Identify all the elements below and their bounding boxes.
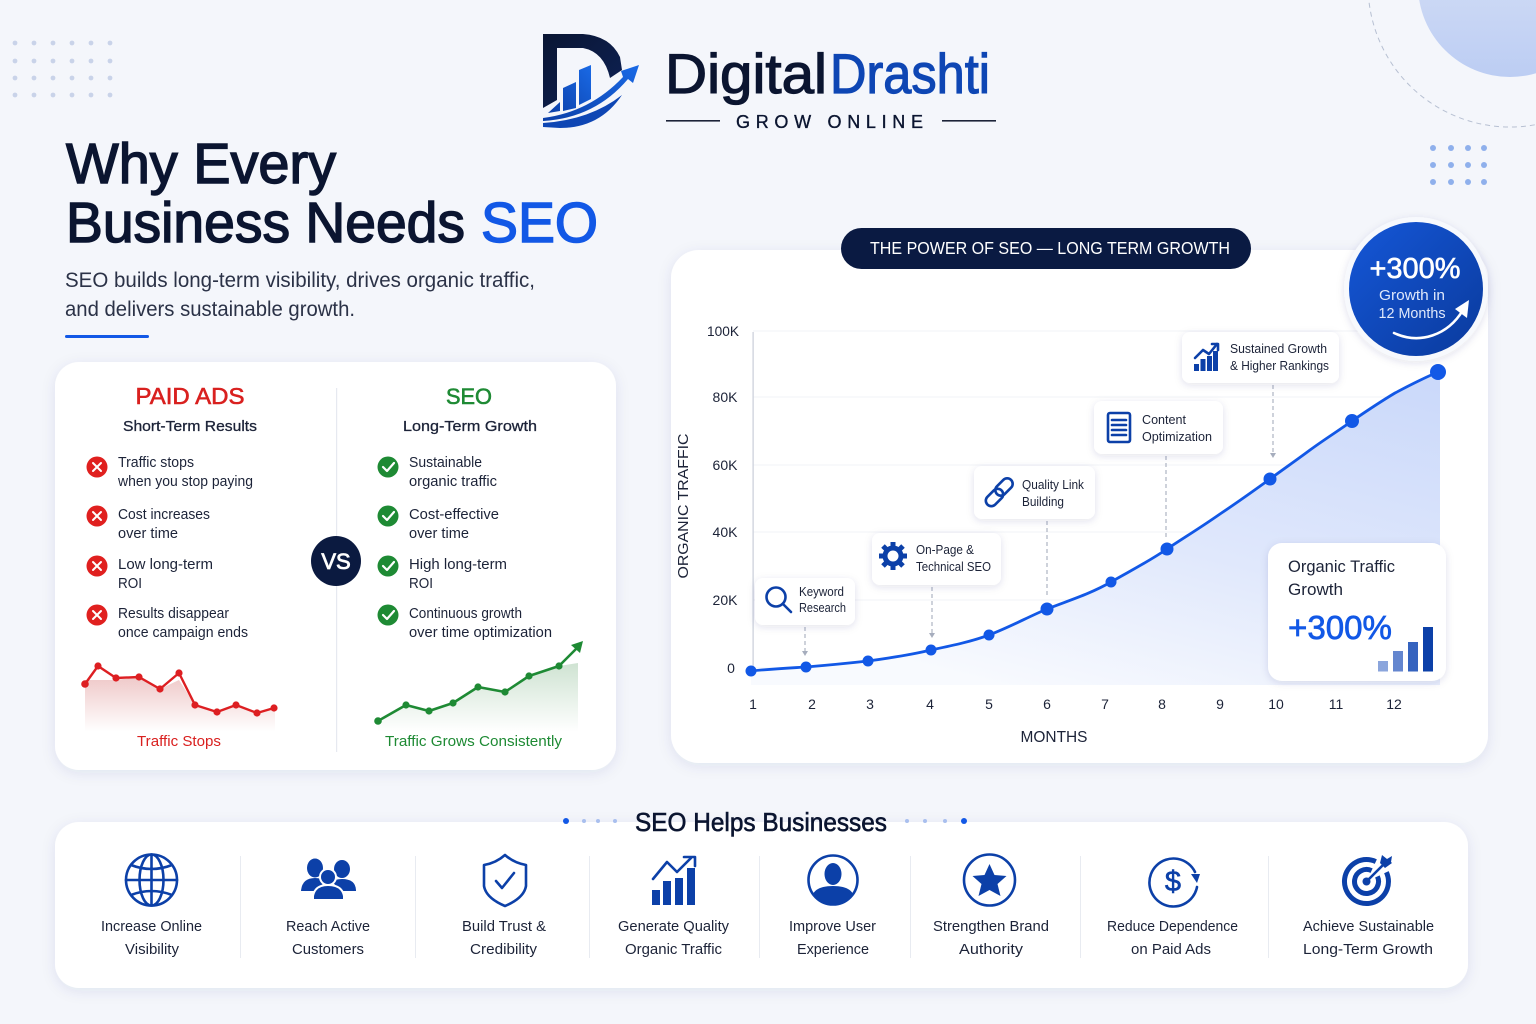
callout: content optimization: Content xyxy=(1142,413,1187,427)
callout: sustained growth: & Higher Rankings xyxy=(1230,359,1329,373)
title: Business Needs xyxy=(66,191,465,255)
decoration: right dot grid xyxy=(1430,145,1487,185)
benefit: reduce paid ads: $ xyxy=(1165,866,1181,898)
panel: growth chart xyxy=(671,250,1488,763)
callout: content optimization xyxy=(1094,401,1223,454)
benefit: organic traffic xyxy=(618,857,729,958)
logo: Drashti xyxy=(830,42,990,105)
callout: sustained growth xyxy=(1182,332,1339,383)
benefit: reduce paid ads: Reduce Dependence xyxy=(1107,918,1238,935)
badge: 300 percent growth: +300% xyxy=(1370,253,1460,285)
x axis labels: 2 xyxy=(808,696,816,712)
benefit: visibility xyxy=(101,854,202,958)
benefit: reduce paid ads xyxy=(1107,859,1238,958)
y axis labels: 100K xyxy=(707,323,740,339)
x axis labels: 9 xyxy=(1216,696,1224,712)
benefit: user experience xyxy=(789,856,876,958)
x axis labels: 1 xyxy=(749,696,757,712)
y axis title: ORGANIC TRAFFIC xyxy=(675,433,692,578)
x axis labels: 4 xyxy=(926,696,934,712)
pill heading: power of seo xyxy=(841,228,1251,269)
callout: link building: Building xyxy=(1022,495,1064,509)
benefit: customers: Customers xyxy=(292,941,364,958)
benefit: brand authority: Authority xyxy=(959,941,1024,958)
benefit: organic traffic: Generate Quality xyxy=(618,918,729,935)
subtitle xyxy=(65,269,535,321)
growth curve xyxy=(746,364,1446,676)
list: paid ads drawbacks: when you stop paying xyxy=(117,474,253,490)
benefit: user experience: Experience xyxy=(797,941,869,958)
y axis labels: 40K xyxy=(713,524,738,540)
callout: keyword research: Keyword xyxy=(799,585,844,599)
chart: traffic grows: Traffic Grows Consistently xyxy=(385,733,563,750)
heading: seo: SEO xyxy=(446,384,492,409)
decoration: top-right circles xyxy=(1368,0,1536,127)
y axis labels: 80K xyxy=(713,389,738,405)
x axis labels: 7 xyxy=(1101,696,1109,712)
callout: keyword research: Research xyxy=(799,601,846,615)
benefit: visibility: Visibility xyxy=(125,941,180,958)
x axis labels: 5 xyxy=(985,696,993,712)
panel: benefits xyxy=(55,822,1468,988)
list: seo benefits: Sustainable xyxy=(409,455,482,471)
subtitle: and delivers sustainable growth. xyxy=(65,298,355,321)
callout: on-page seo: On-Page & xyxy=(916,543,975,557)
y axis labels: 20K xyxy=(713,592,738,608)
list: seo benefits: Continuous growth xyxy=(409,606,522,622)
gridlines xyxy=(753,331,1440,668)
benefit: reduce paid ads: on Paid Ads xyxy=(1131,941,1211,958)
benefit: visibility: Increase Online xyxy=(101,918,202,935)
stat card: organic traffic growth: +300% xyxy=(1288,609,1392,646)
benefit: long-term growth xyxy=(1303,855,1434,958)
callout: sustained growth: Sustained Growth xyxy=(1230,342,1327,356)
subtitle: SEO builds long-term visibility, drives organic traffic, xyxy=(65,269,535,292)
chart: traffic stops xyxy=(81,662,278,750)
callout: on-page seo xyxy=(872,533,1001,585)
pill heading: power of seo: THE POWER OF SEO — LONG TERM GROWTH xyxy=(870,238,1230,258)
y axis labels xyxy=(707,323,740,676)
list: paid ads drawbacks: Results disappear xyxy=(118,606,229,622)
benefit: trust xyxy=(462,855,546,958)
title xyxy=(66,132,598,255)
x axis labels: 6 xyxy=(1043,696,1051,712)
y axis labels: 0 xyxy=(727,660,735,676)
x axis labels: 12 xyxy=(1386,696,1402,712)
stat card: organic traffic growth: Organic Traffic xyxy=(1288,557,1395,576)
heading: seo helps businesses xyxy=(563,807,967,837)
chart: traffic grows xyxy=(374,641,583,750)
benefit: long-term growth: Achieve Sustainable xyxy=(1303,918,1434,935)
list: seo benefits: over time optimization xyxy=(409,625,552,641)
list: paid ads drawbacks: over time xyxy=(118,526,178,542)
connectors xyxy=(805,385,1273,654)
callout: keyword research xyxy=(755,578,855,625)
stat card: organic traffic growth: Growth xyxy=(1288,580,1343,599)
title: Why Every xyxy=(66,132,336,196)
x axis labels: 10 xyxy=(1268,696,1284,712)
heading: paid ads xyxy=(123,383,257,435)
badge: 300 percent growth xyxy=(1344,217,1488,361)
callout: on-page seo: Technical SEO xyxy=(916,560,991,574)
stat card: organic traffic growth xyxy=(1268,543,1446,681)
benefit: customers: Reach Active xyxy=(286,918,370,935)
decoration: top-left dot grid xyxy=(13,41,112,97)
x axis labels: 3 xyxy=(866,696,874,712)
list: paid ads drawbacks xyxy=(86,455,253,641)
benefit: trust: Build Trust & xyxy=(462,918,546,935)
x axis labels: 11 xyxy=(1329,696,1343,712)
list: seo benefits: over time xyxy=(409,526,469,542)
x axis labels xyxy=(749,696,1402,712)
list: seo benefits: ROI xyxy=(409,576,433,592)
list: paid ads drawbacks: once campaign ends xyxy=(118,625,248,641)
vs badge xyxy=(311,536,361,586)
vs badge: VS xyxy=(321,549,351,574)
benefit: customers xyxy=(286,858,370,958)
x axis title: MONTHS xyxy=(1020,729,1088,746)
list: seo benefits: Cost-effective xyxy=(409,507,499,523)
callout: content optimization: Optimization xyxy=(1142,430,1212,444)
title: SEO xyxy=(481,191,598,255)
heading: paid ads: PAID ADS xyxy=(136,383,244,409)
badge: 300 percent growth: Growth in xyxy=(1379,287,1445,304)
chart: traffic stops: Traffic Stops xyxy=(137,733,221,750)
benefit: long-term growth: Long-Term Growth xyxy=(1303,941,1433,958)
y axis labels: 60K xyxy=(713,457,738,473)
list: paid ads drawbacks: Cost increases xyxy=(118,507,210,523)
callout: link building xyxy=(974,466,1095,519)
panel: paid ads vs seo xyxy=(55,362,616,770)
list: seo benefits: High long-term xyxy=(409,557,507,573)
badge: 300 percent growth: 12 Months xyxy=(1378,305,1446,322)
logo tagline: GROW ONLINE xyxy=(736,112,923,132)
heading: seo: Long-Term Growth xyxy=(403,418,537,435)
x axis labels: 8 xyxy=(1158,696,1166,712)
list: paid ads drawbacks: Traffic stops xyxy=(118,455,194,471)
benefit: brand authority: Strengthen Brand xyxy=(933,918,1049,935)
benefit: brand authority xyxy=(933,854,1049,958)
benefit: user experience: Improve User xyxy=(789,918,876,935)
benefit: organic traffic: Organic Traffic xyxy=(625,941,722,958)
list: seo benefits xyxy=(378,455,552,641)
list: seo benefits: organic traffic xyxy=(409,474,497,490)
heading: seo xyxy=(403,384,537,435)
area under curve xyxy=(751,372,1440,685)
heading: paid ads: Short-Term Results xyxy=(123,418,257,435)
logo xyxy=(543,34,996,132)
logo wordmark: Digital xyxy=(665,42,827,105)
heading: seo helps businesses: SEO Helps Businesses xyxy=(635,807,887,837)
list: paid ads drawbacks: ROI xyxy=(118,576,142,592)
callout: link building: Quality Link xyxy=(1022,478,1085,492)
list: paid ads drawbacks: Low long-term xyxy=(118,557,213,573)
benefit: trust: Credibility xyxy=(470,941,538,958)
logo mark xyxy=(543,34,639,128)
